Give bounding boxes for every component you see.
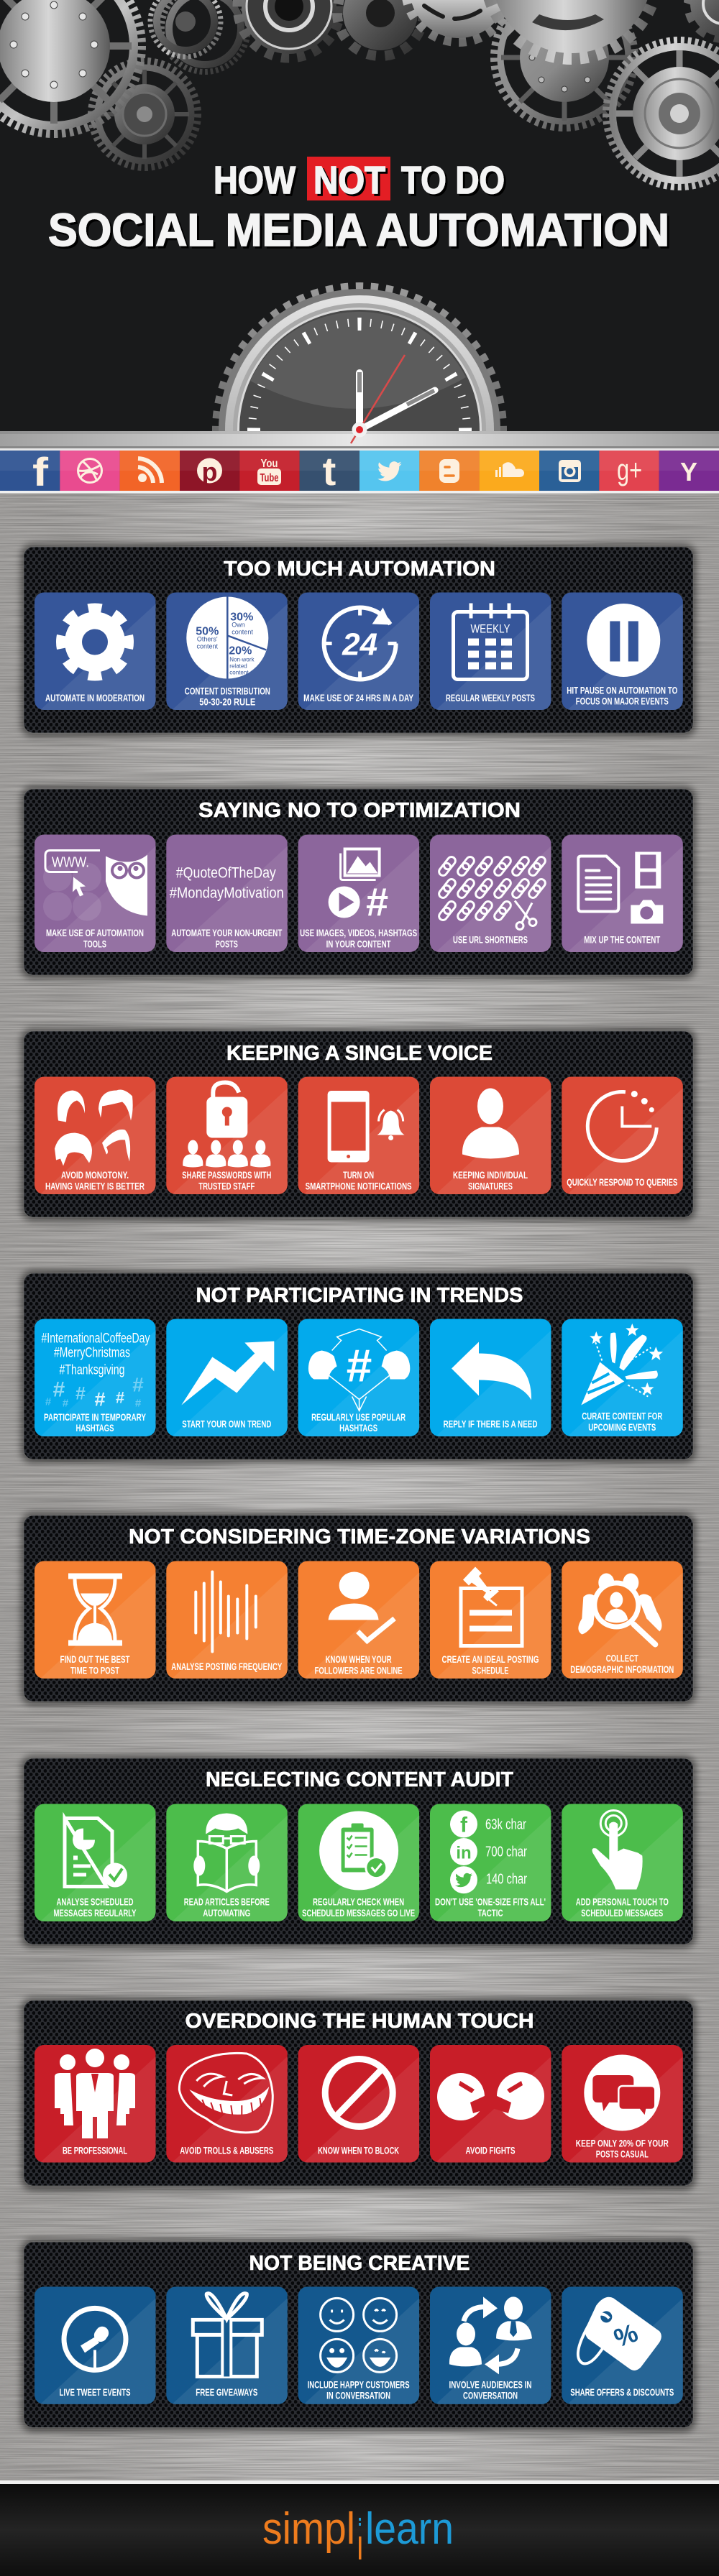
hashtags: #	[53, 1378, 65, 1401]
label	[441, 1653, 539, 1676]
icon: hair styles	[55, 1089, 133, 1165]
card: reply if needed	[430, 1319, 551, 1436]
icon: image, play, hash: #	[366, 880, 388, 924]
heading: OVERDOING THE HUMAN TOUCH	[186, 2010, 533, 2033]
label: IN CONVERSATION	[326, 2389, 390, 2401]
label	[311, 1411, 406, 1434]
title line 1: HOW	[214, 159, 296, 202]
icon: yahoo: Y	[680, 457, 697, 486]
icon: links and scissors	[437, 855, 547, 930]
card: know when to block	[298, 2045, 419, 2163]
label: CREATE AN IDEAL POSTING	[441, 1653, 539, 1665]
card: avoid trolls	[166, 2045, 288, 2163]
panel: too much automation	[24, 547, 693, 733]
label	[46, 927, 144, 949]
icon: stopwatch	[587, 1091, 658, 1162]
label: FIND OUT THE BEST	[60, 1653, 130, 1665]
icon: pinned note	[461, 1566, 522, 1645]
label: USE IMAGES, VIDEOS, HASHTAGS	[300, 927, 417, 938]
social media icon strip	[0, 448, 719, 494]
icon: reply arrow	[452, 1342, 531, 1400]
icon: pie chart: related	[229, 663, 247, 670]
hashtags: #	[135, 1397, 142, 1410]
label: AVOID FIGHTS	[466, 2144, 515, 2156]
label: SHARE OFFERS & DISCOUNTS	[570, 2386, 674, 2398]
label	[570, 1653, 674, 1675]
card: ideal schedule	[430, 1561, 551, 1679]
card: hit pause	[562, 592, 683, 710]
hashtags: #InternationalCoffeeDay	[42, 1331, 150, 1347]
label: AVOID MONOTONY.	[61, 1169, 129, 1181]
label	[182, 1169, 271, 1191]
label: ANALYSE SCHEDULED	[56, 1896, 134, 1908]
label	[315, 1653, 403, 1676]
tile colours	[0, 451, 719, 491]
label: KNOW WHEN YOUR	[326, 1653, 392, 1665]
label	[171, 927, 283, 949]
label: REGULARLY CHECK WHEN	[313, 1896, 404, 1908]
heading: TOO MUCH AUTOMATION	[224, 558, 495, 581]
hashtags: #MerryChristmas	[54, 1345, 130, 1361]
icon: youtube: You	[260, 458, 278, 470]
title	[48, 157, 669, 256]
icon: gear	[62, 609, 128, 675]
card: images videos hashtags	[298, 835, 419, 952]
icon: pie chart: content	[232, 628, 253, 635]
footer	[0, 2480, 719, 2576]
icon: 24 hour clock: 24	[342, 627, 377, 663]
card: content distribution	[166, 592, 288, 710]
label	[435, 1896, 546, 1919]
gears: top left cluster	[0, 0, 248, 167]
panel: not being creative	[24, 2242, 693, 2427]
icon: phone and bell	[328, 1091, 405, 1163]
gears: top centre cluster	[237, 0, 510, 58]
card: weekly posts	[430, 592, 551, 710]
hashtags: #Thanksgiving	[59, 1362, 125, 1378]
card: personal touch	[562, 1804, 683, 1921]
label: UPCOMING EVENTS	[588, 1421, 656, 1433]
label: POSTS CASUAL	[596, 2148, 649, 2159]
card: involve audiences	[430, 2286, 551, 2404]
hashtags: #	[132, 1374, 144, 1395]
icon: arguing heads	[437, 2072, 544, 2120]
icon: youtube	[257, 458, 281, 485]
label	[44, 1411, 146, 1434]
hashtags: #	[45, 1395, 52, 1408]
icon: touch hand	[592, 1811, 643, 1890]
label: SCHEDULED MESSAGES GO LIVE	[302, 1907, 415, 1919]
title line 1: NOT	[313, 159, 385, 202]
label: ADD PERSONAL TOUCH TO	[576, 1896, 669, 1908]
header background	[0, 0, 719, 431]
clock dial	[212, 282, 507, 431]
label	[53, 1896, 137, 1919]
label: FREE GIVEAWAYS	[196, 2386, 257, 2398]
card: one-size fits all	[430, 1804, 551, 1921]
label: MESSAGES REGULARLY	[53, 1907, 137, 1919]
hashtags	[42, 1331, 150, 1410]
label: USE URL SHORTNERS	[453, 934, 528, 946]
card: followers online	[298, 1561, 419, 1679]
card: automation tools	[35, 835, 155, 952]
icon: soundcloud	[495, 462, 524, 477]
card: posting frequency	[166, 1561, 288, 1679]
card: upcoming events	[562, 1319, 683, 1436]
label	[449, 2378, 532, 2401]
character limits: in	[456, 1844, 472, 1862]
card: quickly respond	[562, 1076, 683, 1194]
icon: url bar and owl	[43, 851, 147, 921]
label: MAKE USE OF 24 HRS IN A DAY	[303, 692, 414, 703]
card: start your own trend	[166, 1319, 288, 1436]
card: mix up content	[562, 835, 683, 952]
label: SIGNATURES	[468, 1180, 513, 1191]
icon: chat bubbles	[584, 2055, 660, 2131]
hashtags: #	[116, 1388, 124, 1407]
label: AUTOMATE YOUR NON-URGENT	[171, 927, 283, 938]
character limits: 140 char	[486, 1871, 527, 1887]
label: AUTOMATE IN MODERATION	[45, 692, 145, 703]
icon: calendar: WEEKLY	[470, 622, 510, 635]
title line 1	[214, 159, 505, 202]
label: HASHTAGS	[339, 1422, 377, 1434]
hashtags: #	[75, 1384, 86, 1404]
label	[576, 2137, 669, 2159]
label: CONVERSATION	[463, 2389, 518, 2401]
label: DON'T USE 'ONE-SIZE FITS ALL'	[435, 1896, 546, 1908]
card: smartphone notifications	[298, 1076, 419, 1194]
character limits: 63k char	[485, 1816, 526, 1832]
label: SMARTPHONE NOTIFICATIONS	[306, 1180, 412, 1191]
label	[308, 2378, 410, 2401]
heading: SAYING NO TO OPTIMIZATION	[198, 799, 521, 822]
card: temporary hashtags	[35, 1319, 155, 1436]
metal bar	[0, 431, 719, 448]
card: automate in moderation	[35, 592, 155, 710]
icon: rss	[138, 458, 162, 483]
icon: padlock and team	[183, 1082, 270, 1167]
icon: troll face	[179, 2053, 273, 2133]
label: MIX UP THE CONTENT	[584, 934, 661, 946]
label	[184, 1896, 270, 1919]
icon: pinterest	[197, 457, 222, 486]
icon: url bar and owl: WWW.	[52, 855, 89, 871]
label: KEEP ONLY 20% OF YOUR	[576, 2137, 669, 2148]
character limits: f	[460, 1814, 468, 1837]
card: analyse scheduled messages	[35, 1804, 155, 1921]
title highlight box: NOT	[307, 157, 390, 200]
icon: dribbble	[78, 458, 102, 483]
hashtags: #QuoteOfTheDay	[176, 865, 276, 881]
label	[567, 684, 677, 707]
card: check scheduled messages	[298, 1804, 419, 1921]
label: READ ARTICLES BEFORE	[184, 1896, 270, 1908]
icon: blogger	[439, 459, 459, 483]
title line 1: TO DO	[401, 159, 505, 202]
label: HAVING VARIETY IS BETTER	[45, 1180, 145, 1191]
heading: NEGLECTING CONTENT AUDIT	[206, 1768, 513, 1791]
icon: business people	[55, 2049, 135, 2138]
icon: discount tag: %	[610, 2317, 641, 2353]
label	[300, 927, 417, 949]
label	[60, 1653, 130, 1676]
label: KEEPING INDIVIDUAL	[453, 1169, 528, 1181]
icon: audience exchange	[449, 2296, 532, 2374]
icon: discount tag	[578, 2297, 661, 2370]
icon: pie chart: 50%	[196, 625, 219, 638]
label: TURN ON	[343, 1169, 374, 1181]
icon: pie chart: 30%	[230, 611, 253, 624]
card: offers and discounts	[562, 2286, 683, 2404]
card: happy customers	[298, 2286, 419, 2404]
label: REGULARLY USE POPULAR	[311, 1411, 406, 1423]
label: IN YOUR CONTENT	[326, 938, 391, 949]
card: 24 hours	[298, 592, 419, 710]
icon: youtube: Tube	[260, 472, 279, 484]
label: ANALYSE POSTING FREQUENCY	[171, 1661, 283, 1672]
icon: clipboard	[319, 1811, 398, 1890]
panel: neglecting content audit	[24, 1758, 693, 1944]
icon: pie chart: content	[197, 642, 219, 650]
label: HASHTAGS	[76, 1422, 114, 1434]
icon: google plus: g+	[617, 453, 642, 486]
icon: trend arrow	[181, 1341, 274, 1405]
icon: person	[462, 1088, 519, 1158]
icon: person with check	[329, 1572, 395, 1641]
label: SHARE PASSWORDS WITH	[182, 1169, 271, 1181]
icon: pie chart: Own	[232, 621, 245, 628]
icon: image, play, hash	[329, 849, 388, 924]
icon: microphone	[64, 2308, 126, 2370]
label: DEMOGRAPHIC INFORMATION	[570, 1663, 674, 1675]
card: live tweet events	[35, 2286, 155, 2404]
label	[576, 1896, 669, 1919]
icon: instagram	[559, 460, 581, 482]
label: CONTENT DISTRIBUTION	[185, 685, 270, 697]
icon: person reading	[193, 1814, 260, 1891]
logo: simplilearn: simpl	[262, 2504, 355, 2554]
icon: hourglass	[68, 1574, 122, 1645]
panel: keeping a single voice	[24, 1031, 693, 1217]
hashtags: #MondayMotivation	[170, 885, 284, 901]
icon: hashtag shirt: #	[347, 1339, 372, 1391]
card: read articles	[166, 1804, 288, 1921]
character limits: 700 char	[485, 1844, 527, 1860]
card: url shortners	[430, 835, 551, 952]
icon: pie chart: content	[229, 670, 249, 675]
card: demographic information	[562, 1561, 683, 1679]
icon: report with check	[65, 1818, 127, 1887]
label: START YOUR OWN TREND	[182, 1418, 271, 1430]
card: free giveaways	[166, 2286, 288, 2404]
label	[45, 1169, 145, 1191]
icon: facebook: f	[32, 449, 48, 494]
icon: pie chart: Others'	[197, 635, 218, 642]
icon: 24 hour clock	[324, 608, 397, 680]
label: LIVE TWEET EVENTS	[59, 2386, 131, 2398]
label: TIME TO POST	[70, 1664, 119, 1676]
card: popular hashtags	[298, 1319, 419, 1436]
logo: simplilearn	[262, 2504, 454, 2559]
label: TRUSTED STAFF	[198, 1180, 255, 1191]
label	[582, 1411, 662, 1433]
card: avoid monotony	[35, 1076, 155, 1194]
icon: document, film, camera	[578, 852, 663, 924]
metal background	[0, 463, 719, 2515]
hashtags: #	[63, 1397, 69, 1410]
panel: saying no to optimization	[24, 789, 693, 975]
hashtags: #	[94, 1388, 106, 1410]
icon: magnifier over people	[578, 1574, 661, 1644]
card: keep posts casual	[562, 2045, 683, 2163]
icon: gift box	[193, 2294, 262, 2376]
label	[185, 685, 270, 707]
clock hands	[351, 355, 435, 443]
label: CURATE CONTENT FOR	[582, 1411, 662, 1422]
label: TACTIC	[477, 1907, 503, 1919]
label: 50-30-20 RULE	[199, 696, 255, 707]
panel: overdoing the human touch	[24, 2000, 693, 2186]
icon: party popper	[581, 1324, 663, 1405]
card: non-urgent posts	[166, 835, 288, 952]
card: individual signatures	[430, 1076, 551, 1194]
label: INVOLVE AUDIENCES IN	[449, 2378, 532, 2390]
icon: pie chart: 20%	[229, 645, 252, 657]
label: AUTOMATING	[203, 1907, 250, 1919]
label: REGULAR WEEKLY POSTS	[446, 692, 535, 703]
character limits	[450, 1811, 527, 1893]
card: best time to post	[35, 1561, 155, 1679]
label: FOCUS ON MAJOR EVENTS	[576, 696, 669, 707]
card: avoid fights	[430, 2045, 551, 2163]
heading: NOT PARTICIPATING IN TRENDS	[196, 1284, 523, 1307]
icon: smiley faces	[321, 2298, 397, 2372]
icon: tumblr: t	[323, 448, 336, 494]
label: PARTICIPATE IN TEMPORARY	[44, 1411, 146, 1423]
logo: simplilearn: learn	[365, 2504, 454, 2554]
label	[306, 1169, 412, 1191]
card: be professional	[35, 2045, 155, 2163]
label	[302, 1896, 415, 1919]
panel shadows	[21, 544, 696, 2432]
label: SCHEDULED MESSAGES	[581, 1907, 663, 1919]
bar highlights	[0, 431, 719, 493]
card: share passwords	[166, 1076, 288, 1194]
heading: NOT BEING CREATIVE	[249, 2252, 470, 2275]
label: INCLUDE HAPPY CUSTOMERS	[308, 2378, 410, 2390]
icon: pinterest: p	[201, 457, 217, 486]
panel: not considering time-zone variations	[24, 1515, 693, 1702]
panel: not participating in trends	[24, 1273, 693, 1459]
label: SCHEDULE	[472, 1664, 509, 1676]
label: AVOID TROLLS & ABUSERS	[180, 2144, 273, 2156]
label	[453, 1169, 528, 1191]
label: MAKE USE OF AUTOMATION	[46, 927, 144, 938]
label: POSTS	[216, 938, 238, 949]
icon: pie chart	[186, 596, 268, 678]
label: REPLY IF THERE IS A NEED	[443, 1418, 538, 1430]
icon: pie chart: Non-work	[229, 657, 255, 663]
label: BE PROFESSIONAL	[63, 2144, 127, 2156]
label: COLLECT	[606, 1653, 638, 1664]
icon: twitter	[377, 461, 402, 481]
icon: no sign	[325, 2059, 393, 2127]
label: FOLLOWERS ARE ONLINE	[315, 1664, 403, 1676]
label: KNOW WHEN TO BLOCK	[318, 2144, 399, 2156]
hashtags	[170, 865, 284, 901]
icon: hashtag shirt	[308, 1329, 410, 1411]
heading: NOT CONSIDERING TIME-ZONE VARIATIONS	[129, 1525, 590, 1548]
label: TOOLS	[83, 938, 106, 949]
icon: sound wave	[196, 1572, 256, 1651]
title line 2: SOCIAL MEDIA AUTOMATION	[48, 204, 669, 256]
icon: pause	[587, 604, 660, 677]
heading: KEEPING A SINGLE VOICE	[226, 1042, 493, 1065]
gears: top right cluster	[487, 0, 719, 187]
icon: calendar	[453, 604, 528, 680]
